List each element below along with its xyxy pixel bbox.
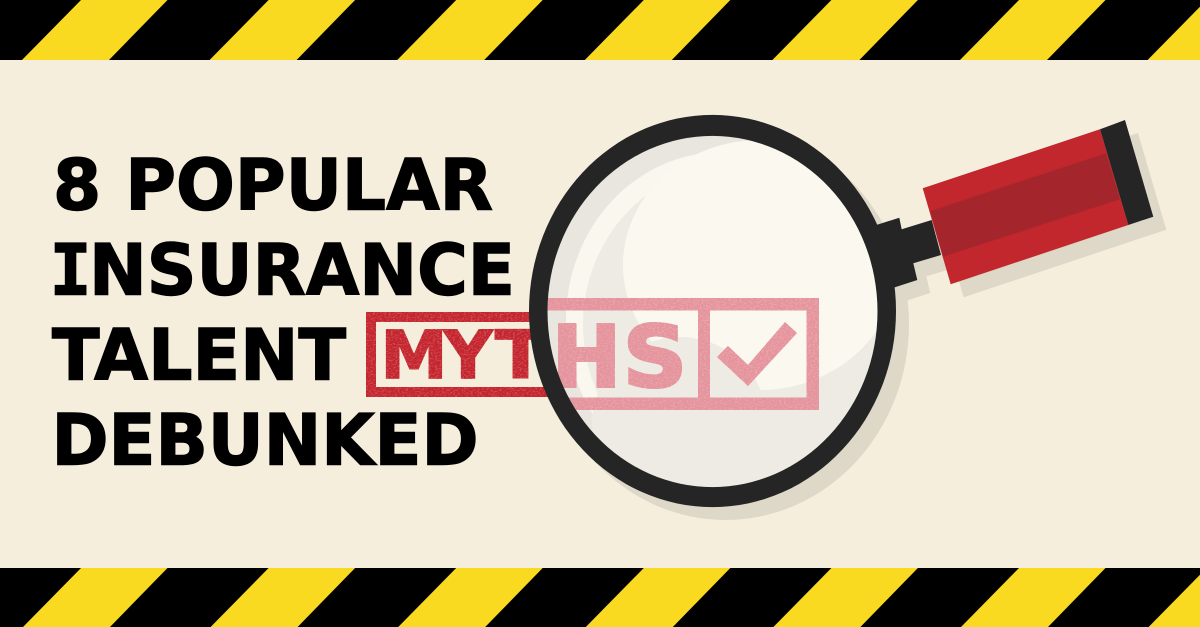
handle end cap — [1100, 120, 1153, 225]
lens light band — [566, 154, 696, 414]
magnified stamp: MYTHS with check mark — [530, 298, 819, 410]
title: DEBUNKED — [52, 400, 478, 482]
lens lower shade blob — [593, 337, 760, 487]
hazard stripe band: bottom — [0, 568, 1200, 627]
title: TALENT — [52, 314, 346, 396]
stamp outside the lens: MYTHS — [366, 312, 600, 397]
handle grip — [923, 129, 1128, 284]
stamp outside the lens: MYTHS: Y — [442, 317, 494, 394]
lens grey crescent — [583, 196, 876, 483]
stamp outside the lens: MYTHS: T — [495, 317, 546, 394]
magnified stamp: MYTHS with check mark: H — [552, 308, 621, 408]
title: I — [50, 230, 92, 312]
lens outer grey rim — [548, 136, 748, 432]
magnifying glass lens — [548, 136, 878, 487]
magnifying glass ring — [529, 115, 896, 507]
title — [50, 144, 515, 482]
title: 8 POPULAR — [53, 144, 493, 226]
magnifying glass shadow — [542, 128, 1166, 520]
hazard stripe band: top — [0, 0, 1200, 60]
magnifying glass handle — [870, 120, 1153, 292]
stamp outside the lens: MYTHS: M — [380, 317, 448, 394]
title: NSURANCE — [89, 230, 515, 312]
check mark — [717, 322, 797, 386]
handle grip dark band — [930, 153, 1120, 257]
handle collar and shaft — [870, 218, 941, 292]
lens bright centre — [623, 140, 897, 390]
magnified stamp: MYTHS with check mark: S — [623, 308, 687, 408]
